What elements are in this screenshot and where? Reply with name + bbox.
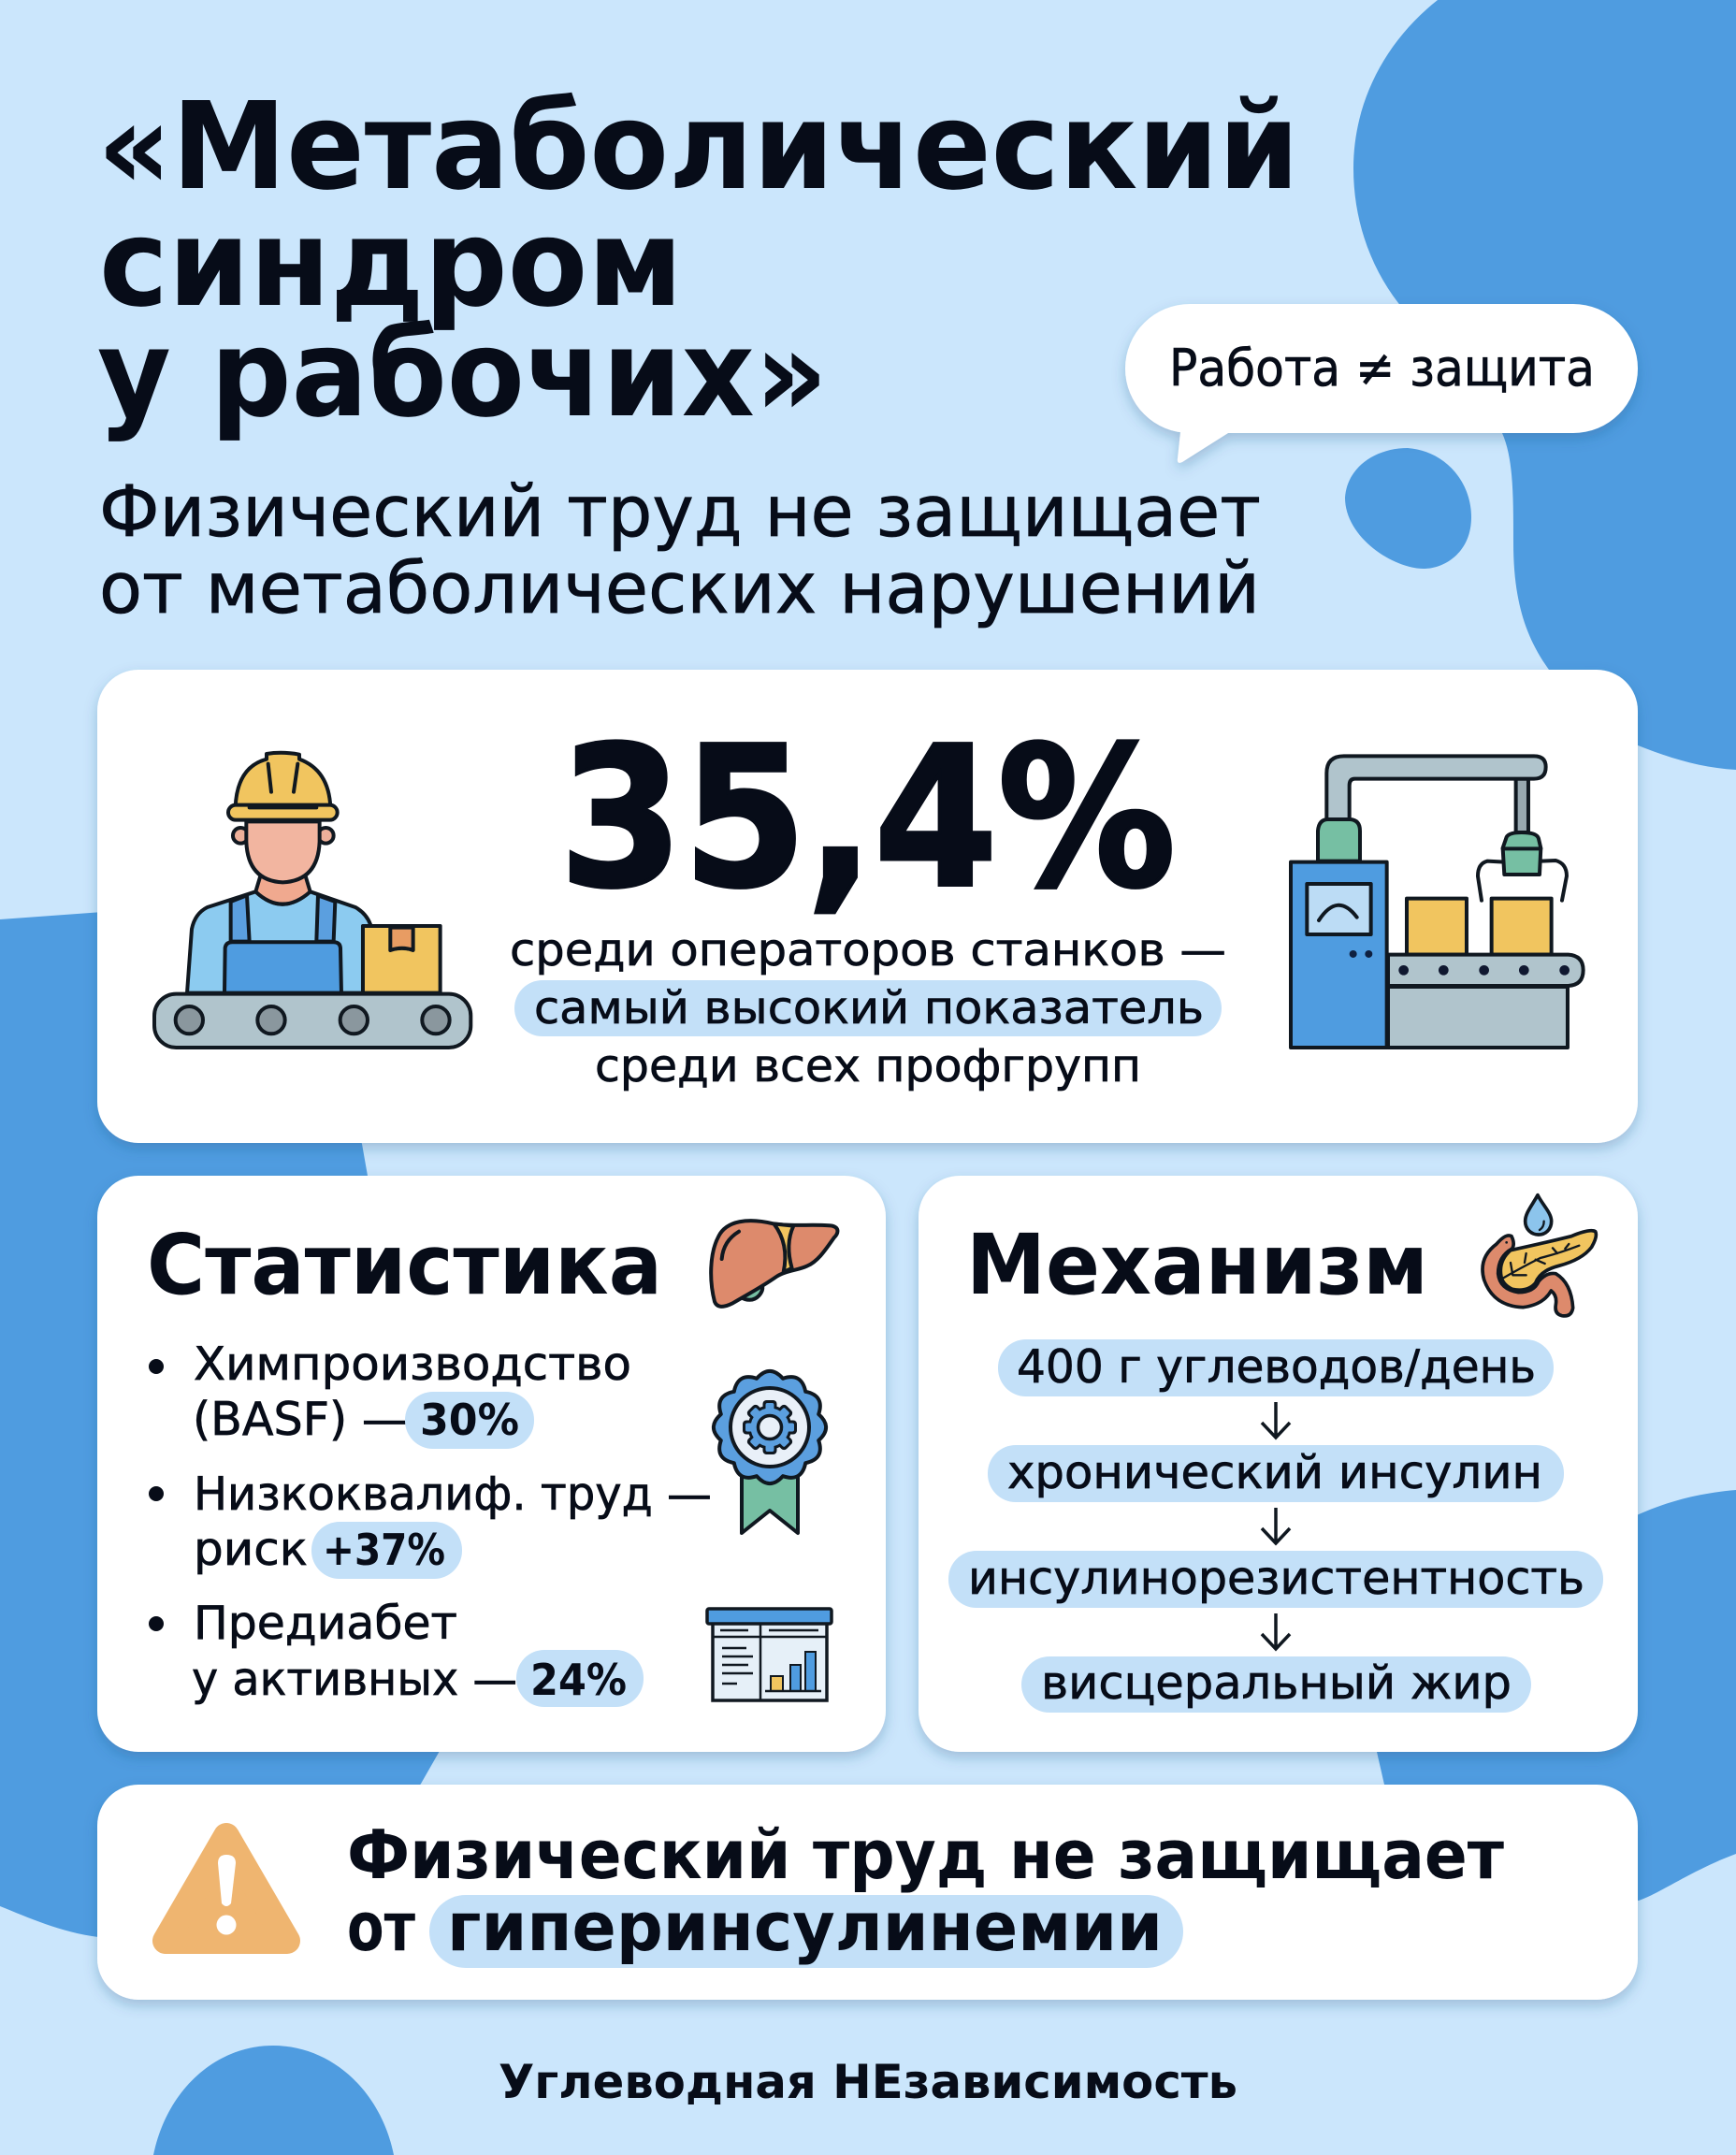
hero caption: самый высокий показатель — [534, 982, 1204, 1034]
subtitle: Физический труд не защищает — [99, 470, 1261, 553]
heading: mechanism: Механизм — [966, 1216, 1428, 1313]
arrow — [1262, 1402, 1290, 1438]
speech bubble: Работа ≠ защита — [1169, 339, 1595, 398]
subtitle — [99, 470, 1261, 629]
arrow — [1262, 1508, 1290, 1543]
list item: chemical production: 30% — [420, 1395, 519, 1445]
list item: chemical production: (BASF) — — [193, 1393, 408, 1446]
panel: conclusion — [97, 1785, 1638, 2000]
conclusion text: гиперинсулинемии — [447, 1887, 1163, 1966]
footer brand: Углеводная НЕзависимость — [499, 2055, 1237, 2109]
hero caption — [510, 924, 1226, 1092]
list item: prediabetes — [149, 1597, 644, 1707]
flow step: chronic insulin: хронический инсулин — [1007, 1446, 1542, 1499]
flow step: visceral fat: висцеральный жир — [1041, 1656, 1512, 1710]
title: синдром — [99, 194, 683, 334]
arrow — [1262, 1613, 1290, 1649]
conclusion text: от — [347, 1887, 415, 1966]
list item: prediabetes: 24% — [530, 1655, 627, 1705]
conclusion text — [347, 1815, 1504, 1968]
list item: prediabetes: у активных — — [192, 1653, 517, 1706]
title — [97, 77, 1299, 444]
hero caption: среди операторов станков — — [510, 924, 1226, 976]
panel: statistics — [97, 1176, 886, 1752]
list item: low-skilled labour — [149, 1468, 712, 1579]
list item: low-skilled labour: Низкоквалиф. труд — — [194, 1468, 712, 1521]
title: «Метаболический — [97, 77, 1299, 217]
list item: chemical production: Химпроизводство — [194, 1338, 631, 1391]
list item: low-skilled labour: риск — [194, 1523, 308, 1576]
icon: liver — [711, 1221, 837, 1307]
flow step: insulin resistance: инсулинорезистентность — [968, 1552, 1584, 1605]
icon: gear badge — [714, 1371, 826, 1533]
speech bubble — [1125, 304, 1638, 463]
list item: prediabetes: Предиабет — [194, 1597, 457, 1650]
panel: mechanism — [919, 1176, 1638, 1752]
heading: statistics: Статистика — [147, 1216, 662, 1313]
subtitle: от метаболических нарушений — [99, 546, 1260, 629]
flow step: 400 g carbs: 400 г углеводов/день — [1017, 1340, 1536, 1394]
icon: dashboard table — [707, 1609, 832, 1700]
conclusion text: Физический труд не защищает — [347, 1815, 1504, 1894]
big number: 35,4% — [559, 705, 1176, 931]
icon: pancreas with drop — [1483, 1195, 1596, 1316]
title: у рабочих» — [97, 304, 828, 444]
icon: factory machine — [1291, 756, 1584, 1048]
panel: hero statistic — [97, 670, 1638, 1143]
icon: worker at conveyor — [154, 753, 470, 1048]
list item: chemical production — [149, 1338, 631, 1449]
icon: warning triangle — [166, 1836, 287, 1941]
list item: low-skilled labour: +37% — [323, 1525, 445, 1575]
hero caption: среди всех профгрупп — [595, 1040, 1141, 1092]
